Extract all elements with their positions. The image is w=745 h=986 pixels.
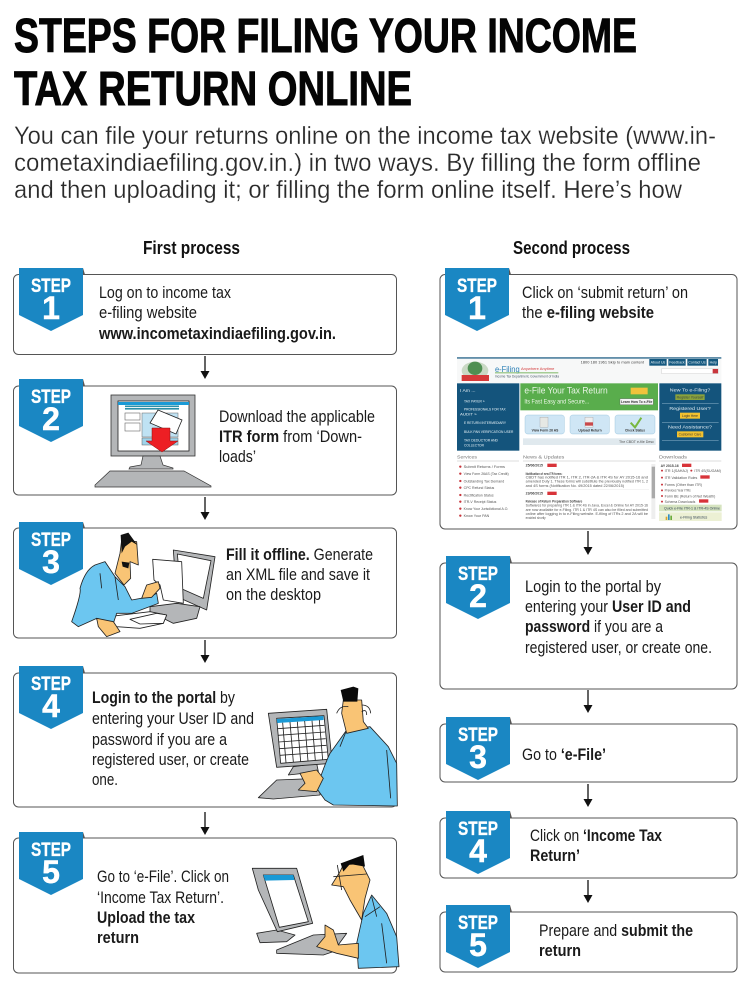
panel: first process step 3 — [14, 522, 396, 638]
website screenshot: e-Filing portal: Need Assistance? — [668, 425, 712, 431]
text: step 3 — [226, 546, 373, 604]
website screenshot: e-Filing portal: E RETURN INTERMEDIARY — [464, 421, 506, 425]
text: step 5 — [539, 922, 693, 960]
website screenshot: e-Filing portal: View Form 26AS (Tax Credit) — [464, 472, 509, 476]
website screenshot: e-Filing portal: amended Duty 1. These forms will substitute the previously notified ITR 1, 2 — [526, 480, 648, 484]
badge: step 2: 2 — [469, 578, 487, 614]
text: step 4 — [92, 689, 254, 789]
text: step 1: www.incometaxindiaefiling.gov.in. — [98, 325, 336, 343]
badge: step 1: 1 — [468, 290, 486, 326]
panel: first process step 4 — [14, 666, 397, 807]
badge: step 3: STEP — [31, 530, 71, 551]
text: step 1: the e-filing website — [522, 304, 654, 322]
text: step 3: an XML file and save it — [226, 566, 370, 584]
website screenshot: e-Filing portal: Submit Returns / Forms — [464, 465, 505, 469]
website screenshot: e-Filing portal: e-Filing Statistics — [680, 516, 707, 520]
website screenshot: e-Filing portal: 23/06/2015 — [526, 492, 543, 496]
panel: second process step 5 — [440, 905, 737, 972]
badge: step 1: 1 — [42, 290, 60, 326]
website screenshot: e-Filing portal: Upload Return — [578, 428, 602, 432]
icon: computer with download arrow — [95, 395, 211, 487]
website screenshot: e-Filing portal: Previous Year ITRs — [665, 489, 691, 493]
panel: first process step 2 — [14, 379, 396, 495]
website screenshot: e-Filing portal: enabled shortly — [526, 516, 546, 520]
website screenshot: e-Filing portal: Know Your PAN — [464, 514, 490, 518]
website screenshot: e-Filing portal: Outstanding Tax Demand — [464, 479, 504, 483]
badge: step 5: 5 — [42, 854, 60, 890]
text: step 5: Prepare and submit the — [539, 922, 693, 940]
badge: step 3 — [19, 522, 85, 585]
title: TAX RETURN ONLINE — [14, 63, 412, 116]
website screenshot: e-Filing portal: e-Filing — [495, 365, 520, 374]
badge: step 2: STEP — [31, 387, 71, 408]
badge: step 2 — [19, 379, 85, 442]
badge: step 1 — [19, 268, 85, 331]
text: step 1 — [522, 284, 688, 322]
badge: step 3: 3 — [42, 544, 60, 580]
panel: second process step 2 — [440, 556, 737, 689]
text: step 4: Login to the portal by — [92, 689, 236, 707]
website screenshot: e-Filing portal: ITR Validation Rules — [665, 476, 697, 480]
website screenshot: e-Filing portal: Registered User? — [669, 406, 711, 412]
website screenshot: e-Filing portal: Softwares for preparing ITR 1 & ITR 4S in Java, Excel & Online for AY 2015-16 — [526, 504, 648, 508]
text: step 2: registered user, or create one. — [525, 639, 712, 657]
arrow — [584, 531, 592, 555]
website screenshot: e-Filing portal: I Am ... — [460, 388, 476, 394]
website screenshot: e-Filing portal: Contact Us — [688, 361, 706, 365]
badge: step 4: 4 — [42, 688, 60, 724]
badge: step 2: STEP — [458, 564, 498, 585]
website screenshot: e-Filing portal: 25/06/2015 — [526, 464, 543, 468]
intro paragraph: cometaxindiaefiling.gov.in.) in two ways. By filling the form offline — [14, 149, 701, 177]
text: step 2: loads’ — [219, 448, 256, 466]
text: step 4: registered user, or create — [92, 751, 249, 769]
text: step 2: Login to the portal by — [525, 578, 662, 596]
badge: step 5 — [19, 832, 85, 895]
website screenshot: e-Filing portal: Help — [710, 361, 717, 365]
badge: step 5: 5 — [469, 927, 487, 963]
badge: step 4: STEP — [458, 819, 498, 840]
website screenshot: e-Filing portal: Login Here — [682, 414, 698, 418]
website screenshot: e-Filing portal: Downloads — [659, 455, 688, 461]
website screenshot: e-Filing portal: TAX PAYER » — [464, 399, 485, 403]
text: step 3: on the desktop — [226, 586, 321, 604]
badge: step 3: 3 — [469, 739, 487, 775]
website screenshot: e-Filing portal: Forms (Other than ITR) — [665, 483, 702, 487]
text: step 1: Click on ‘submit return’ on — [522, 284, 688, 302]
heading: second process: Second process — [513, 238, 630, 258]
text: step 2: entering your User ID and — [525, 598, 691, 616]
intro paragraph — [14, 122, 716, 204]
website screenshot: e-Filing portal: Feedback — [669, 361, 685, 365]
text: step 3: Go to ‘e-File’ — [522, 746, 606, 764]
website screenshot: e-Filing portal: Learn How To e-File — [621, 400, 652, 404]
panel: second process step 3 — [440, 717, 737, 782]
heading: first process: First process — [143, 238, 240, 258]
badge: step 1: STEP — [31, 276, 71, 297]
arrow — [200, 356, 210, 379]
website screenshot: e-Filing portal: Form BE (Return of Net Wealth) — [665, 494, 715, 498]
text: step 5: Go to ‘e-File’. Click on — [97, 868, 229, 886]
website screenshot: e-Filing portal: are now available for e-Filing. ITR 1 & ITR 4S can also be filled and submitted — [526, 508, 648, 512]
text: step 4: entering your User ID and — [92, 710, 254, 728]
website screenshot: e-Filing portal: The CBDT e-file Desc — [619, 440, 654, 444]
website screenshot: e-Filing portal: News & Updates — [523, 455, 565, 461]
website screenshot: e-Filing portal: Release of Return Preparation Software — [526, 500, 582, 504]
website screenshot: e-Filing portal: PROFESSIONALS FOR TAX — [464, 408, 506, 412]
website screenshot: e-Filing portal: Schema Downloads — [665, 500, 695, 504]
text: step 5 — [97, 868, 229, 947]
text: step 5: ‘Income Tax Return’. — [97, 889, 224, 907]
badge: step 5: STEP — [31, 840, 71, 861]
text: step 1 — [98, 284, 336, 343]
illustration: man with papers at a computer — [72, 533, 215, 637]
text: step 5: return — [539, 942, 581, 960]
website screenshot: e-Filing portal: New To e-Filing? — [670, 388, 711, 394]
website screenshot: e-Filing portal: and 4S forms (Notification No. 49/2015 dated 22/06/2015) — [526, 484, 624, 488]
intro paragraph: You can file your returns online on the income tax website (www.in- — [14, 122, 716, 150]
intro paragraph: and then uploading it; or filling the form online itself. Here’s how — [14, 176, 683, 204]
arrow — [200, 640, 210, 663]
badge: step 4: STEP — [31, 674, 71, 695]
website screenshot: e-Filing portal: ITR-V Receipt Status — [464, 500, 496, 504]
website screenshot: e-Filing portal: CPC Refund Status — [464, 486, 494, 490]
text: step 5: Upload the tax — [97, 909, 196, 927]
website screenshot: e-Filing portal: COLLECTOR — [464, 443, 484, 447]
badge: step 5: STEP — [458, 913, 498, 934]
website screenshot: e-Filing portal: Its Fast Easy and Secure... — [524, 399, 590, 405]
text: step 3: Fill it offline. Generate — [226, 546, 373, 564]
text: step 4: password if you are a — [92, 731, 228, 749]
website screenshot: e-Filing portal: Check Status — [625, 428, 645, 432]
panel: first process step 5 — [14, 832, 399, 973]
text: step 5: return — [97, 929, 139, 947]
website screenshot: e-Filing portal: ITR 1(SAHAJ) — [665, 469, 688, 473]
website screenshot: e-Filing portal: View Form 26 AS — [532, 428, 559, 432]
text: step 4 — [530, 827, 663, 865]
text: step 1: Log on to income tax — [99, 284, 232, 302]
website screenshot: e-Filing portal: Notification of new ITR forms: — [526, 472, 562, 476]
website screenshot: e-Filing portal: Services — [457, 455, 478, 461]
website screenshot: e-Filing portal: Anywhere Anytime — [521, 367, 554, 371]
text: step 4: one. — [92, 771, 118, 789]
website screenshot: e-Filing portal: TAX DEDUCTOR AND — [464, 439, 498, 443]
arrow — [200, 812, 210, 835]
title — [14, 10, 637, 116]
website screenshot: e-Filing portal: BULK PAN VERIFICATION USER — [464, 430, 514, 434]
arrow — [584, 690, 592, 713]
badge: step 4 — [446, 811, 512, 874]
panel: second process step 1 — [440, 268, 737, 529]
badge: step 2 — [446, 556, 512, 619]
panel: second process step 4 — [440, 811, 737, 878]
website screenshot: e-Filing portal: Quick e-File ITR-1 & ITR-4S Online — [664, 506, 720, 510]
website screenshot: e-Filing portal: e-File Your Tax Return — [524, 385, 608, 395]
badge: step 2: 2 — [42, 401, 60, 437]
badge: step 1 — [445, 268, 511, 331]
text: step 2: password if you are a — [525, 618, 664, 636]
website screenshot: e-Filing portal: AUDIT » — [460, 412, 477, 416]
arrow — [584, 880, 592, 903]
website screenshot: e-Filing portal — [457, 357, 722, 521]
text: step 4: Click on ‘Income Tax — [530, 827, 663, 845]
website screenshot: e-Filing portal: About Us — [651, 361, 665, 365]
text: step 2 — [219, 408, 375, 466]
illustration: man using a computer with a spreadsheet — [258, 687, 397, 806]
website screenshot: e-Filing portal: Register Yourself — [677, 395, 703, 399]
panel: first process step 1 — [14, 268, 396, 354]
badge: step 3: STEP — [458, 725, 498, 746]
badge: step 5 — [446, 905, 512, 968]
arrow — [584, 784, 592, 807]
website screenshot: e-Filing portal: ITR 4S(SUGAM) — [694, 469, 721, 473]
website screenshot: e-Filing portal: Rectification Status — [464, 493, 494, 497]
website screenshot: e-Filing portal: Income Tax Department, Government of India — [495, 374, 559, 378]
arrow — [200, 497, 210, 520]
badge: step 4 — [19, 666, 85, 729]
illustration: man typing at a computer — [252, 855, 399, 968]
text: step 1: e-filing website — [99, 304, 197, 322]
website screenshot: e-Filing portal: Customer Care — [679, 433, 701, 437]
text: step 2: Download the applicable — [219, 408, 375, 426]
text: step 2: ITR form from ‘Down- — [219, 428, 362, 446]
website screenshot: e-Filing portal: CBDT has notified ITR 1, ITR 2, ITR-2A & ITR 4S for AY 2015-16 and — [526, 476, 648, 480]
website screenshot: e-Filing portal: AY 2015-16 — [661, 464, 679, 468]
website screenshot: e-Filing portal: 1800 180 1961 Skip to main content — [581, 361, 644, 365]
badge: step 3 — [446, 717, 512, 780]
text: step 4: Return’ — [530, 847, 580, 865]
website screenshot: e-Filing portal: online after logging in to e-Filing website. E-filing of ITRs 2 and 2A will be — [526, 512, 648, 516]
text: step 2 — [525, 578, 712, 657]
badge: step 4: 4 — [469, 833, 487, 869]
badge: step 1: STEP — [457, 276, 497, 297]
website screenshot: e-Filing portal: Know Your Jurisdictional A.O. — [464, 507, 508, 511]
